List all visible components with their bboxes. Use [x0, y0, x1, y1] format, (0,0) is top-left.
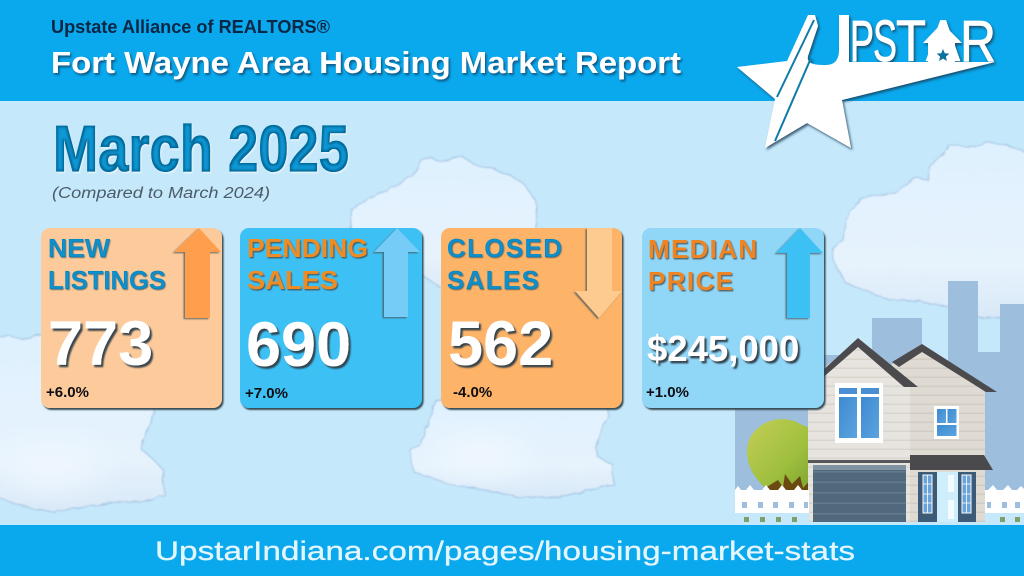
logo: Upstar star: S — [873, 9, 897, 74]
card: pending sales — [240, 228, 422, 408]
left wing wall — [808, 342, 910, 522]
label: PENDING — [247, 233, 368, 263]
header: report title: Fort Wayne Area Housing Market Report — [51, 45, 681, 80]
cloud: behind top of cards — [347, 157, 560, 300]
label: PRICE — [648, 266, 733, 296]
right wing wall — [892, 348, 985, 522]
house illustration — [735, 338, 1024, 522]
arrow: up — [174, 228, 221, 318]
label: NEW — [48, 233, 110, 263]
card: new listings — [41, 228, 222, 408]
logo: Upstar star: R — [960, 9, 996, 74]
value: 562 — [448, 309, 553, 379]
arrow: down — [575, 228, 622, 318]
cloud: right — [832, 142, 1024, 318]
roof — [808, 338, 997, 392]
logo: Upstar star: T — [896, 9, 926, 74]
comparison note: (Compared to March 2024) — [52, 185, 270, 202]
fence left — [735, 485, 809, 522]
porch roof — [910, 455, 993, 470]
value: 690 — [246, 310, 351, 380]
fence right — [985, 485, 1024, 522]
garage trim and door — [808, 460, 910, 522]
footer link: UpstarIndiana.com/pages/housing-market-stats — [155, 536, 855, 566]
logo: Upstar star: A — [926, 9, 960, 74]
label: SALES — [447, 265, 539, 295]
small window — [934, 406, 959, 439]
footer band — [0, 525, 1024, 576]
month heading: March 2025 — [53, 112, 349, 185]
change: -4.0% — [453, 384, 492, 401]
card: closed sales — [441, 228, 622, 408]
value: $245,000 — [647, 328, 799, 369]
arrow: up — [776, 228, 823, 318]
icon: bush — [747, 419, 815, 492]
header: organisation name: Upstate Alliance of REALTORS® — [51, 16, 330, 37]
change: +1.0% — [646, 384, 689, 401]
value: 773 — [48, 309, 153, 379]
arrow: up — [374, 228, 420, 317]
card: median price — [642, 228, 824, 408]
cloud: lower centre — [410, 395, 614, 497]
entry doors — [918, 472, 976, 522]
change: +7.0% — [245, 385, 288, 402]
label: CLOSED — [447, 233, 562, 263]
upper window — [835, 383, 883, 443]
label: LISTINGS — [48, 265, 166, 295]
skyline — [735, 281, 1024, 495]
logo: Upstar star: P — [850, 9, 874, 74]
logo: Upstar star — [737, 9, 996, 148]
cloud: lower left — [0, 334, 164, 512]
change: +6.0% — [46, 384, 89, 401]
label: MEDIAN — [648, 234, 757, 264]
label: SALES — [247, 265, 338, 295]
header band — [0, 0, 1024, 101]
